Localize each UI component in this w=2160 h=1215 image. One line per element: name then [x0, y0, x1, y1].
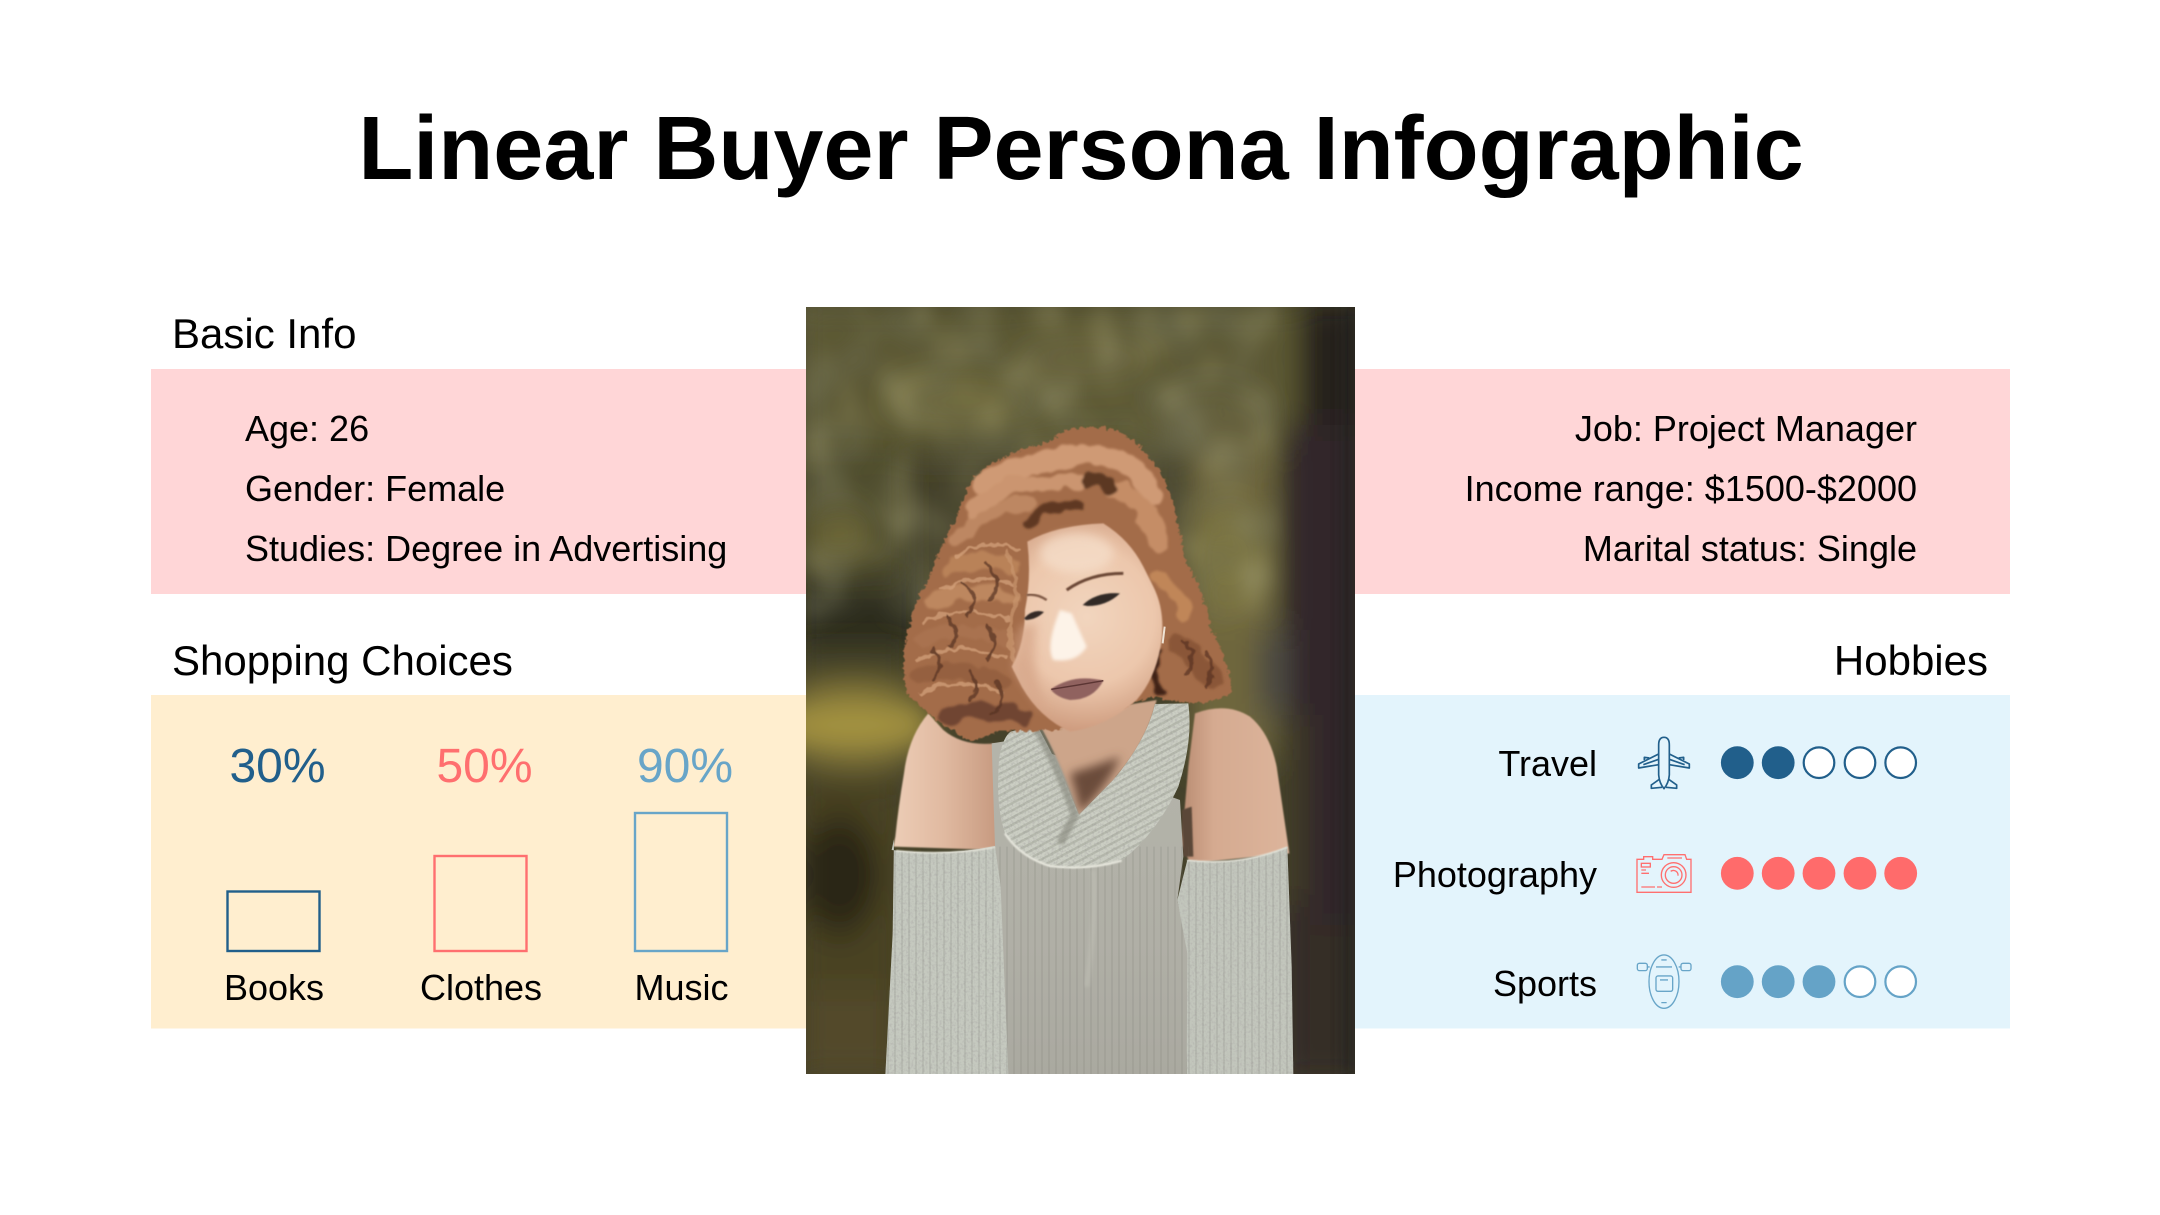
hair strands and curls: [917, 545, 1212, 713]
percent: books: 30%: [229, 740, 326, 793]
left arm: [893, 713, 997, 850]
text: income: Income range: $1500-$2000: [1465, 468, 1917, 509]
label: books: Books: [224, 967, 324, 1008]
text: gender: Gender: Female: [245, 468, 505, 509]
percent: clothes: 50%: [436, 740, 533, 793]
label: music: Music: [634, 967, 729, 1008]
icon: airplane: [1639, 737, 1689, 789]
label: sports: Sports: [1493, 963, 1597, 1004]
hair broad tones: [917, 455, 1213, 717]
neck: [1037, 700, 1157, 815]
lips: [1051, 678, 1103, 700]
panel: hobbies: [1355, 695, 2010, 1028]
text: job: Job: Project Manager: [1575, 408, 1917, 449]
cowl collar: [998, 703, 1190, 868]
photo: body with arms and sweater: [885, 700, 1293, 1075]
panel: basic info: [151, 369, 806, 594]
cheek and jaw shading: [1010, 622, 1038, 689]
eyes: [1083, 593, 1120, 606]
panel: job info: [1355, 369, 2010, 594]
sweater body: [992, 740, 1188, 1075]
bar: music: [635, 813, 727, 951]
eyebrows: [1067, 573, 1123, 590]
rating: sports: [1721, 965, 1916, 998]
heading: basic info: Basic Info: [172, 310, 356, 357]
heading: shopping choices: Shopping Choices: [172, 637, 513, 684]
bar: clothes: [434, 856, 526, 951]
title: Linear Buyer Persona Infographic: [358, 99, 1804, 199]
nose: [1050, 610, 1087, 661]
label: travel: Travel: [1498, 743, 1597, 784]
photo: woman with curly hair and grey sweater: [771, 300, 1362, 1085]
text: marital status: Marital status: Single: [1583, 528, 1917, 569]
earring: [1163, 627, 1165, 643]
heading: hobbies: Hobbies: [1834, 637, 1988, 684]
label: clothes: Clothes: [420, 967, 542, 1008]
left sleeve: [885, 839, 1008, 1075]
icon: camera: [1637, 855, 1691, 892]
right arm: [1182, 708, 1289, 863]
photo background foliage and tree: [771, 300, 1362, 1085]
bar: books: [228, 892, 320, 951]
foliage mottling: [800, 300, 1279, 620]
right sleeve: [1177, 847, 1293, 1075]
percent: music: 90%: [637, 740, 733, 793]
hair mass: [903, 427, 1232, 742]
icon: kayak: [1637, 955, 1691, 1008]
photo: hair and face: [903, 427, 1232, 742]
text: studies: Studies: Degree in Advertising: [245, 528, 727, 569]
forehead highlight: [1040, 533, 1113, 573]
label: photography: Photography: [1393, 854, 1597, 895]
text: age: Age: 26: [245, 408, 369, 449]
rating: travel: [1721, 746, 1916, 779]
panel: shopping choices: [151, 695, 806, 1028]
face: [1012, 523, 1162, 732]
rating: photography: [1721, 857, 1917, 890]
